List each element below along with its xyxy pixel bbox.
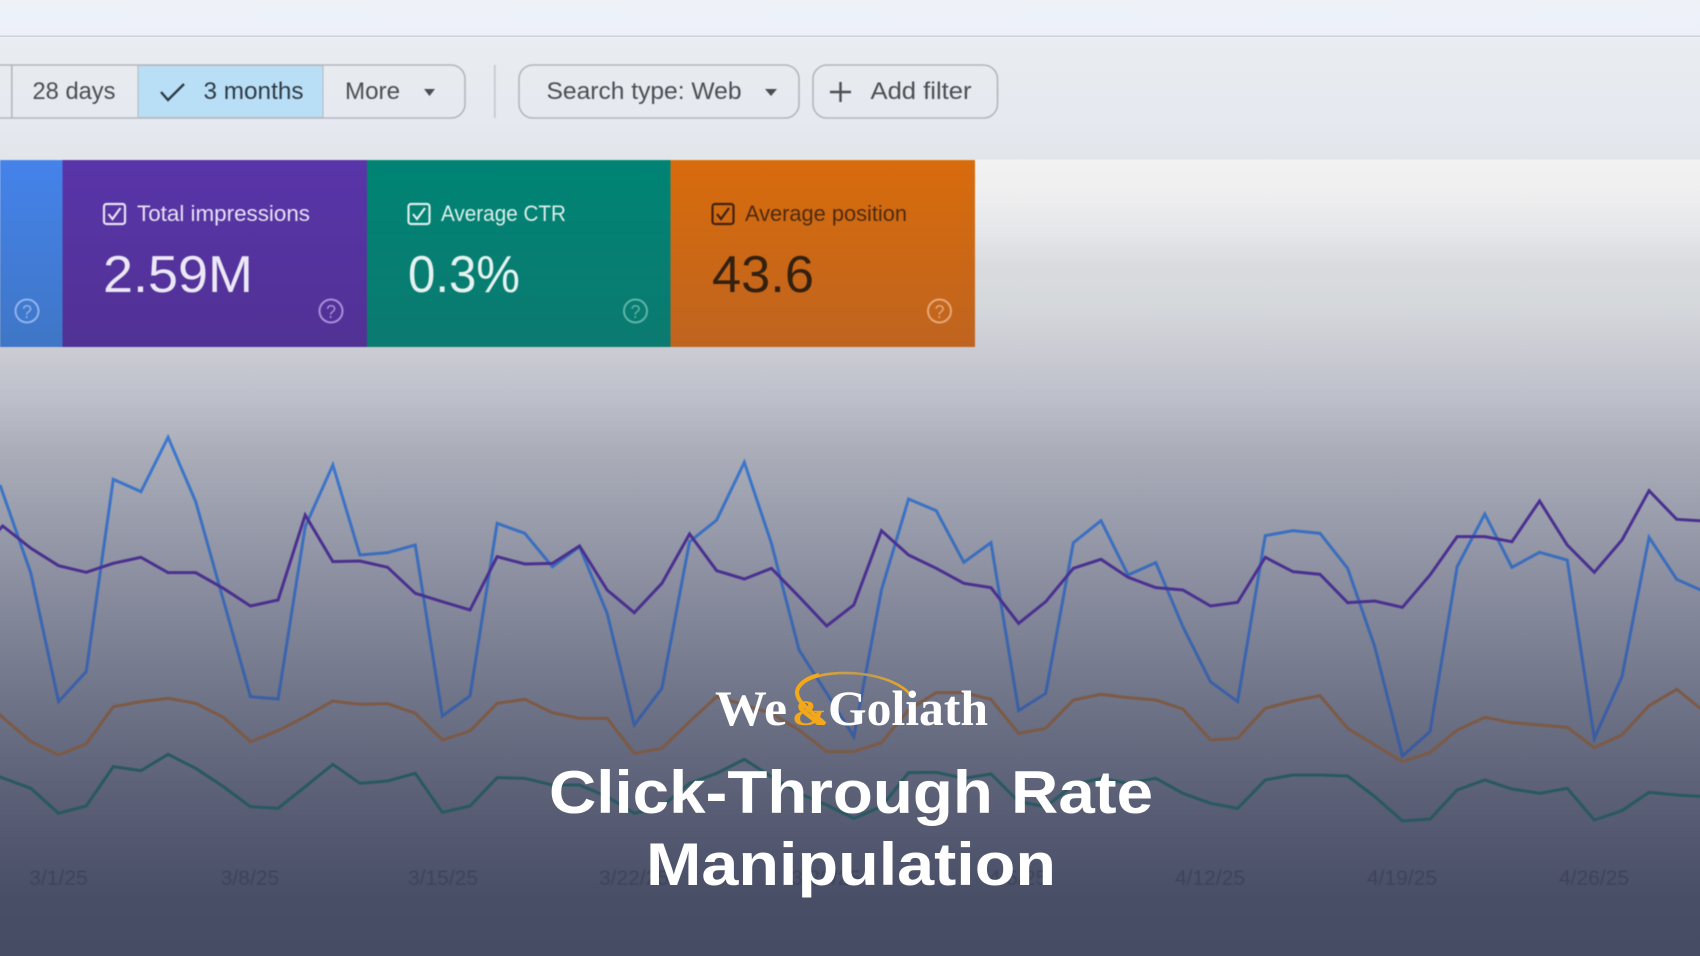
date axis labels: 3/1/25 — [29, 867, 88, 890]
toolbar — [0, 65, 998, 118]
ampersand and swoosh — [792, 673, 910, 733]
icon: help — [928, 300, 951, 322]
logo: We & Goliath: We — [715, 680, 787, 736]
card: average ctr: Average CTR — [441, 201, 566, 226]
icon: help: ? — [934, 302, 945, 322]
top bar divider — [0, 36, 1700, 37]
more option: More — [345, 78, 400, 105]
icon: help: ? — [22, 302, 32, 322]
icon: help: ? — [326, 302, 336, 322]
icon: help — [624, 300, 647, 322]
logo: We & Goliath — [715, 673, 988, 736]
icon: checkbox — [104, 204, 125, 224]
card: total clicks (cropped) — [0, 160, 62, 347]
date axis labels: 4/5/25 — [989, 867, 1047, 890]
card: average ctr — [367, 160, 670, 347]
3 months selected option — [138, 66, 323, 118]
date axis labels — [29, 867, 1629, 890]
icon: checkbox — [712, 204, 734, 224]
card: total impressions — [62, 160, 367, 347]
date axis labels: 4/19/25 — [1367, 867, 1437, 890]
title — [549, 759, 1153, 898]
logo: We & Goliath: Goliath — [828, 680, 988, 736]
line: average position (teal) — [0, 754, 1700, 821]
date axis labels: 3/29/25 — [791, 867, 861, 890]
line: total impressions (purple) — [0, 491, 1700, 626]
line chart — [0, 437, 1700, 821]
metric cards — [0, 160, 975, 347]
date axis labels: 3/22/25 — [599, 867, 669, 890]
date axis labels: 3/8/25 — [221, 867, 279, 890]
icon: help: ? — [630, 302, 641, 322]
icon: help — [16, 300, 38, 322]
more option — [345, 78, 435, 105]
search type button: Search type: Web — [546, 78, 742, 105]
card: average position: Average position — [745, 201, 907, 226]
card: average position: 43.6 — [712, 246, 814, 304]
line: total clicks (blue) — [0, 437, 1700, 756]
add filter button: Add filter — [870, 78, 972, 105]
date axis labels: 3/15/25 — [408, 867, 478, 890]
ampersand and swoosh: & — [792, 693, 827, 733]
card: average position — [670, 160, 975, 347]
add filter button — [813, 65, 998, 118]
card: total impressions: Total impressions — [137, 201, 310, 226]
3 months selected option: 3 months — [204, 78, 304, 105]
date range button group — [0, 65, 465, 118]
title: Manipulation — [646, 831, 1056, 898]
icon: help — [320, 300, 342, 322]
icon: checkbox — [408, 204, 430, 224]
date axis labels: 4/26/25 — [1559, 867, 1629, 890]
card: total impressions: 2.59M — [103, 246, 253, 304]
search type button — [519, 65, 799, 118]
title: Click-Through Rate — [549, 759, 1153, 826]
line: average ctr (brown) — [0, 689, 1700, 762]
date axis labels: 4/12/25 — [1175, 867, 1245, 890]
card: average ctr: 0.3% — [408, 246, 520, 304]
28 days option: 28 days — [32, 78, 116, 105]
